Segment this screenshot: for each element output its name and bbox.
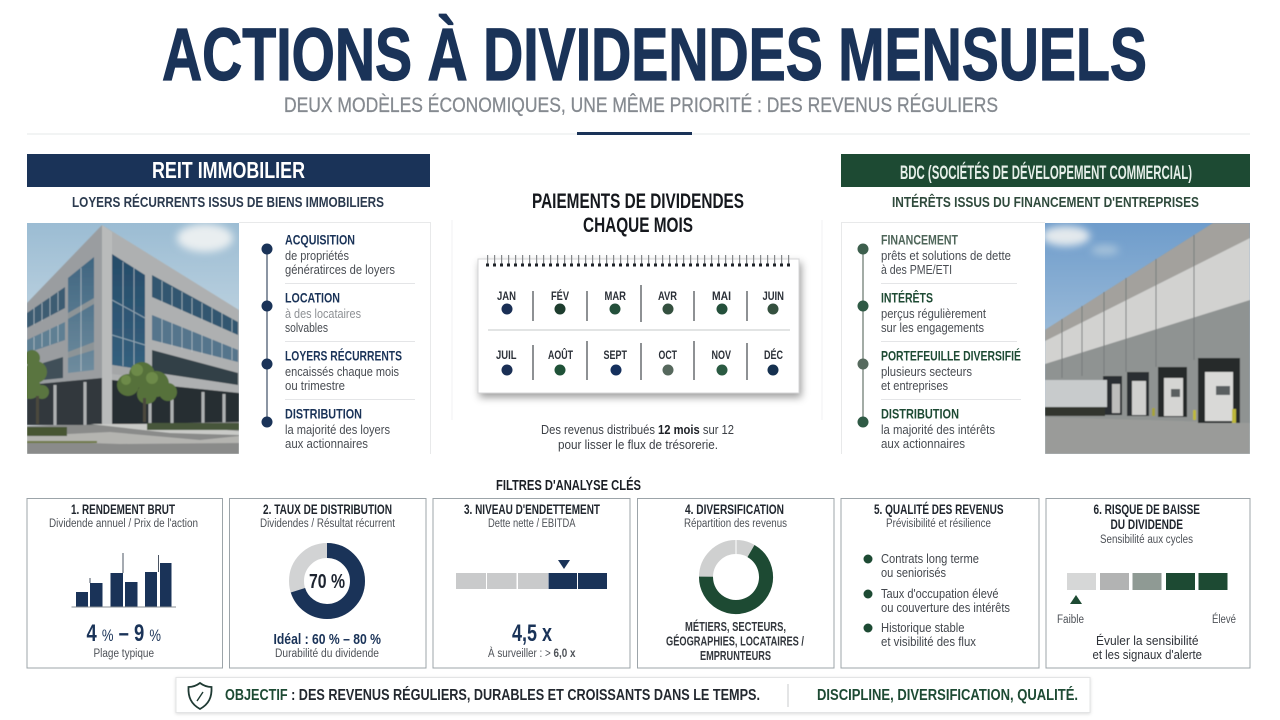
step: portefeuille diversifié: PORTEFEUILLE DIVERSIFIÉ <box>881 348 1021 364</box>
card 2: taux de distribution <box>230 498 426 668</box>
heading: monthly payments: PAIEMENTS DE DIVIDENDES <box>532 190 744 213</box>
text: discipline: DISCIPLINE, DIVERSIFICATION, QUALITÉ. <box>817 685 1078 704</box>
card 1: rendement brut: Dividende annuel / Prix de l'action <box>49 518 198 530</box>
months row 1: FÉV <box>551 290 569 303</box>
months row 1: MAR <box>604 291 627 303</box>
card 3: niveau d'endettement: 3. NIVEAU D'ENDETTEMENT <box>464 502 601 517</box>
card 5: qualité des revenus <box>841 498 1039 668</box>
step: loyers récurrents <box>285 348 402 393</box>
heading: REIT <box>27 154 430 187</box>
months row 2: NOV <box>712 350 731 362</box>
calendar <box>478 259 799 393</box>
card 2: taux de distribution: 2. TAUX DE DISTRIBUTION <box>263 502 392 517</box>
step: acquisition: de propriétés <box>285 249 349 263</box>
step: location: à des locataires <box>285 307 361 321</box>
gauge: risk: Élevé <box>1212 613 1236 626</box>
text: objective: OBJECTIF : DES REVENUS RÉGULIERS, DURABLES ET CROISSANTS DANS LE TEMPS. <box>225 685 760 704</box>
donut chart: 70 %: 70 % <box>309 571 345 593</box>
months row 1: MAI <box>712 291 731 303</box>
bullet list: revenue quality: ou couverture des intérêts <box>881 601 1010 615</box>
card 1: rendement brut <box>27 498 222 668</box>
step: financement: prêts et solutions de dette <box>881 249 1011 263</box>
step: financement: FINANCEMENT <box>881 232 958 248</box>
card 4: diversification: Répartition des revenus <box>684 518 787 530</box>
card 6: risque de baisse du dividende: DU DIVIDENDE <box>1110 517 1183 532</box>
months row 2 <box>496 349 783 376</box>
step: financement: à des PME/ETI <box>881 263 952 277</box>
heading: REIT: REIT IMMOBILIER <box>152 157 305 183</box>
timeline: REIT steps <box>262 232 415 451</box>
step: intérêts: sur les engagements <box>881 321 984 335</box>
step: distribution <box>285 406 390 451</box>
step: intérêts: INTÉRÊTS <box>881 288 933 306</box>
photo: office building <box>19 223 239 454</box>
step: acquisition <box>285 232 395 277</box>
step: portefeuille diversifié <box>881 348 1021 393</box>
subheading: REIT: LOYERS RÉCURRENTS ISSUS DE BIENS IMMOBILIERS <box>72 194 384 211</box>
text: diversification axes <box>666 619 804 663</box>
card 3: niveau d'endettement: Dette nette / EBITDA <box>488 518 576 530</box>
text: sensitivity note <box>1092 633 1202 662</box>
step: loyers récurrents: LOYERS RÉCURRENTS <box>285 348 402 364</box>
panel: REIT immobilier <box>19 154 430 454</box>
timeline: BDC steps <box>858 232 1021 451</box>
panel: monthly payments <box>452 190 822 452</box>
bullet list: revenue quality: Taux d'occupation élevé <box>881 587 999 601</box>
step: distribution: aux actionnaires <box>285 437 368 451</box>
panel: BDC <box>841 154 1250 454</box>
subtitle: DEUX MODÈLES ÉCONOMIQUES, UNE MÊME PRIORITÉ : DES REVENUS RÉGULIERS <box>284 94 998 117</box>
step: distribution: DISTRIBUTION <box>881 406 959 422</box>
months row 2: DÉC <box>764 349 783 362</box>
bullet list: revenue quality: ou seniorisés <box>881 566 946 580</box>
icon: shield <box>188 683 212 709</box>
card 2: taux de distribution: Idéal : 60 % – 80 % <box>274 631 381 648</box>
months row 2: SEPT <box>604 350 627 362</box>
gauge: risk <box>1057 573 1236 626</box>
caption: 12 months <box>541 423 734 452</box>
card 3: niveau d'endettement: 4,5 x <box>512 620 552 647</box>
heading: monthly payments <box>532 190 744 237</box>
text: diversification axes: GÉOGRAPHIES, LOCATAIRES / <box>666 634 804 648</box>
bullet list: revenue quality <box>864 552 1010 649</box>
step: location <box>285 290 361 335</box>
heading: BDC <box>841 154 1250 187</box>
donut chart: diversification <box>695 536 777 618</box>
card 1: rendement brut: 4 % – 9 % <box>86 620 161 647</box>
months row 1: AVR <box>658 291 678 303</box>
step: portefeuille diversifié: et entreprises <box>881 379 948 393</box>
months row 1: JAN <box>497 291 516 303</box>
step: financement <box>881 232 1011 277</box>
step: location: LOCATION <box>285 290 340 306</box>
subheading: BDC: INTÉRÊTS ISSUS DU FINANCEMENT D'ENTREPRISES <box>892 193 1199 211</box>
card 6: risque de baisse du dividende: 6. RISQUE DE BAISSE <box>1094 502 1200 517</box>
months row 1: JUIN <box>762 291 784 303</box>
step: acquisition: génératirces de loyers <box>285 263 395 277</box>
card 5: qualité des revenus: Prévisibilité et résilience <box>886 518 991 530</box>
card 3: niveau d'endettement <box>433 498 630 668</box>
card 6: risque de baisse du dividende <box>1046 498 1250 668</box>
text: diversification axes: MÉTIERS, SECTEURS, <box>685 619 786 634</box>
step: loyers récurrents: ou trimestre <box>285 379 345 393</box>
step: intérêts <box>881 288 986 335</box>
photo: warehouse <box>1042 223 1250 454</box>
step: distribution: aux actionnaires <box>881 437 965 451</box>
step: distribution: la majorité des intérêts <box>881 423 995 437</box>
gauge: risk: Faible <box>1057 614 1084 626</box>
gauge: leverage <box>456 560 607 589</box>
text: sensitivity note: et les signaux d'alerte <box>1092 648 1202 662</box>
months row 2: JUIL <box>496 350 516 362</box>
card 6: risque de baisse du dividende: Sensibilité aux cycles <box>1100 534 1193 546</box>
caption: 12 months: pour lisser le flux de trésorerie. <box>558 438 718 452</box>
donut chart: 70 % <box>296 550 358 612</box>
step: portefeuille diversifié: plusieurs secteurs <box>881 365 972 379</box>
heading: monthly payments: CHAQUE MOIS <box>583 214 693 237</box>
step: acquisition: ACQUISITION <box>285 232 355 248</box>
bullet list: revenue quality: Contrats long terme <box>881 552 979 566</box>
text: sensitivity note: Évuler la sensibilité <box>1096 633 1199 648</box>
card 1: rendement brut: 1. RENDEMENT BRUT <box>71 502 176 517</box>
months row 2: AOÛT <box>548 349 573 362</box>
step: distribution: DISTRIBUTION <box>285 406 362 422</box>
card 3: niveau d'endettement: À surveiller : > 6,0 x <box>488 647 576 660</box>
step: distribution <box>881 406 995 451</box>
card 2: taux de distribution: Dividendes / Résultat récurrent <box>260 518 396 530</box>
card 4: diversification: 4. DIVERSIFICATION <box>685 502 784 517</box>
months row 2: OCT <box>658 350 677 362</box>
caption: 12 months: Des revenus distribués 12 mois sur 12 <box>541 423 734 437</box>
bar chart: yield <box>72 553 176 607</box>
bullet list: revenue quality: Historique stable <box>881 621 965 635</box>
text: diversification axes: EMPRUNTEURS <box>700 649 771 663</box>
step: location: solvables <box>285 321 328 335</box>
card 5: qualité des revenus: 5. QUALITÉ DES REVENUS <box>874 502 1004 517</box>
card 4: diversification <box>638 498 834 668</box>
step: intérêts: perçus régulièrement <box>881 307 986 321</box>
heading: key filters: FILTRES D'ANALYSE CLÉS <box>496 477 641 494</box>
step: loyers récurrents: encaissés chaque mois <box>285 365 399 379</box>
card 1: rendement brut: Plage typique <box>94 648 154 660</box>
step: distribution: la majorité des loyers <box>285 423 390 437</box>
card 2: taux de distribution: Durabilité du dividende <box>275 648 379 660</box>
bullet list: revenue quality: et visibilité des flux <box>881 635 977 649</box>
months row 1 <box>497 290 784 314</box>
callout: objective bar <box>176 678 1090 712</box>
